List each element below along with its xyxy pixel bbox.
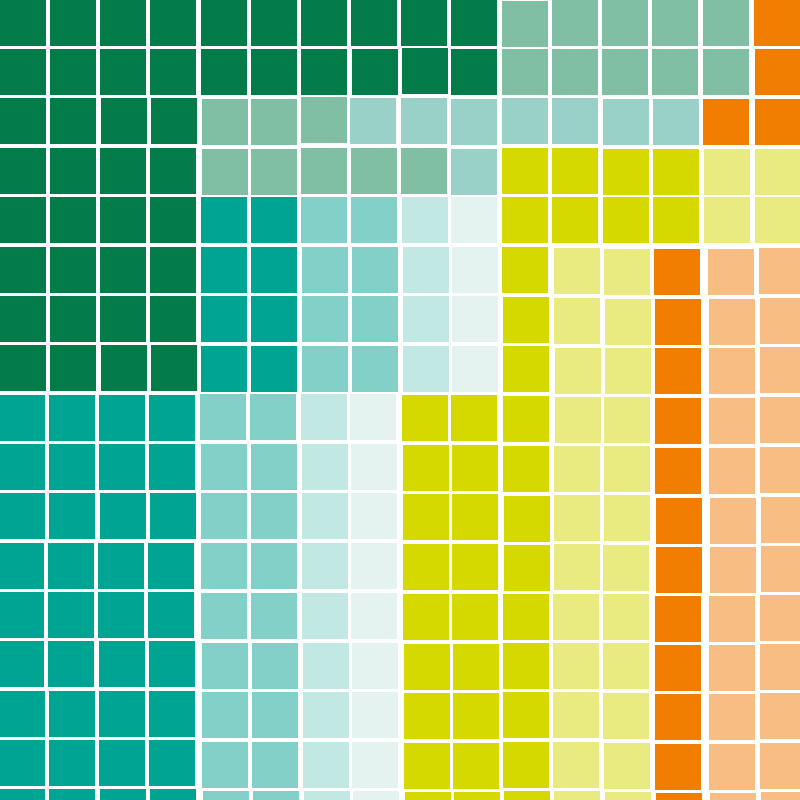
block: pale sea-green tiles	[350, 98, 699, 195]
block: light orange tiles	[708, 248, 800, 800]
block: dark green tiles	[0, 0, 497, 391]
block: orange column tiles	[654, 249, 702, 800]
block: pale teal tiles	[301, 197, 449, 800]
block: light yellow tiles	[553, 149, 800, 800]
block: top-right orange tiles	[703, 0, 800, 145]
block: teal tiles	[0, 197, 297, 800]
block: yellow tiles	[402, 148, 699, 800]
block: light teal tiles	[200, 197, 398, 800]
block: mid green tiles	[202, 0, 749, 195]
block: palest teal tiles	[350, 197, 498, 800]
